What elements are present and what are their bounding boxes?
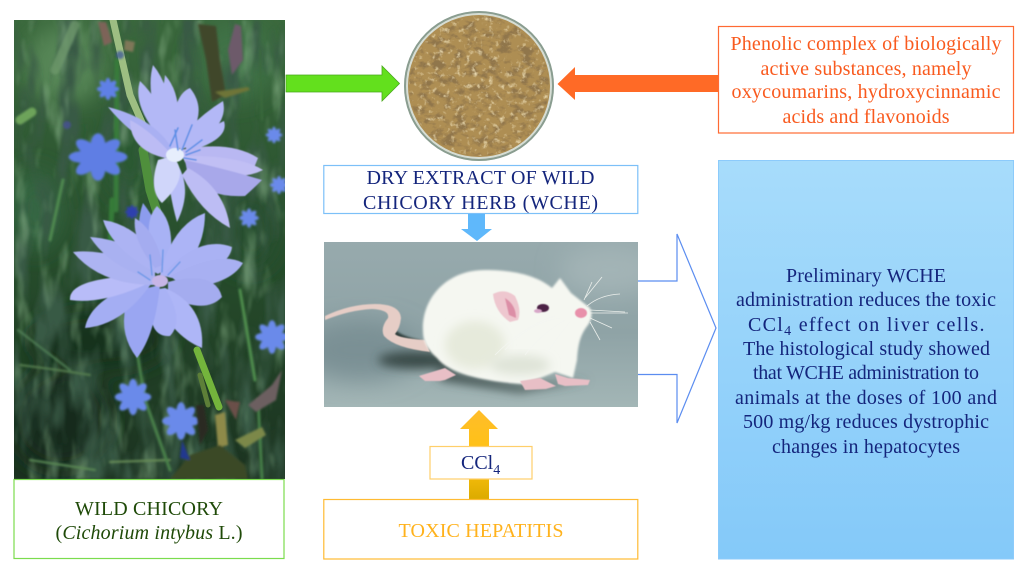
panel: conclusion: 4 xyxy=(784,324,792,339)
icon: dish of dry extract powder xyxy=(404,11,554,161)
arrow: blue, extract to rat xyxy=(461,214,492,241)
label box: CCl4: 4 xyxy=(493,463,500,478)
small blue flowers xyxy=(63,51,289,440)
arrow: outline, rat to conclusion xyxy=(638,234,716,423)
panel: conclusion: administration reduces the toxic xyxy=(736,289,996,311)
feet xyxy=(419,368,590,390)
label box: CCl4 xyxy=(430,446,532,479)
nose xyxy=(575,308,587,318)
panel: conclusion: that WCHE administration to xyxy=(753,362,979,384)
green photo caption box xyxy=(14,480,284,558)
text box: toxic hepatitis xyxy=(324,500,638,559)
panel: conclusion xyxy=(718,160,1014,559)
tail xyxy=(325,304,430,352)
text box: phenolic complex: acids and flavonoids xyxy=(782,106,950,128)
green photo caption box: WILD CHICORY xyxy=(75,498,223,520)
arrow: green, chicory to extract xyxy=(286,66,400,101)
panel: conclusion: Preliminary WCHE xyxy=(786,265,946,287)
text box: phenolic complex: Phenolic complex of biologically xyxy=(730,33,1002,55)
shadows xyxy=(378,351,590,392)
stems xyxy=(113,20,219,407)
whiskers xyxy=(495,277,628,355)
photo: wild chicory flowers xyxy=(9,20,289,479)
ear xyxy=(493,291,519,322)
photo: white laboratory rat xyxy=(324,242,638,407)
label box: CCl4: CCl xyxy=(461,452,493,474)
panel: conclusion: effect on liver cells. xyxy=(792,314,986,336)
upper large flower xyxy=(108,65,263,228)
text box: toxic hepatitis: TOXIC HEPATITIS xyxy=(398,520,564,542)
panel: conclusion: 500 mg/kg reduces dystrophic xyxy=(743,411,989,433)
text box: dry extract label: DRY EXTRACT OF WILD xyxy=(366,167,594,189)
arrow: yellow, CCl4 to rat xyxy=(460,410,498,499)
panel: conclusion: changes in hepatocytes xyxy=(772,436,960,458)
text box: phenolic complex xyxy=(718,26,1014,133)
lower large flower xyxy=(70,203,243,358)
panel: conclusion: The histological study showed xyxy=(743,338,990,360)
text box: dry extract label xyxy=(324,166,638,214)
arrow: orange, phenolic complex to extract xyxy=(558,67,718,100)
text box: phenolic complex: active substances, namely xyxy=(760,58,972,80)
panel: conclusion: animals at the doses of 100 and xyxy=(735,387,997,409)
body and head xyxy=(423,270,592,384)
text box: dry extract label: CHICORY HERB (WCHE) xyxy=(363,192,598,214)
text box: phenolic complex: oxycoumarins, hydroxycinnamic xyxy=(732,81,1001,103)
buds bottom xyxy=(170,370,282,479)
panel: conclusion: CCl xyxy=(748,314,784,336)
green photo caption box: (Cichorium intybus L.) xyxy=(56,522,242,544)
eye xyxy=(537,304,549,312)
buds top xyxy=(98,22,250,102)
